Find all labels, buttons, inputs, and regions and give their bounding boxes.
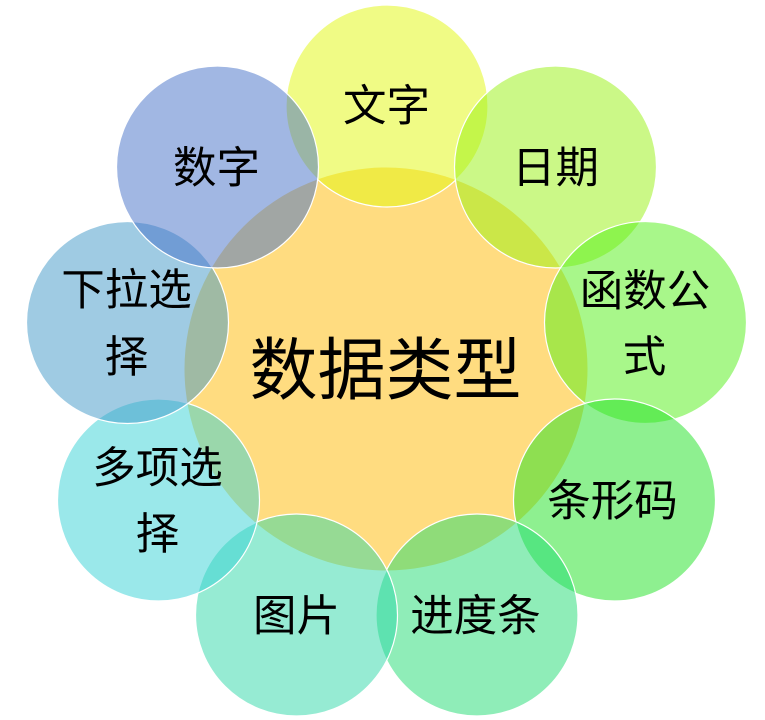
- petal circle: 图片: [196, 514, 398, 716]
- petal circle: 多项选择: [58, 399, 260, 601]
- petal circle: 条形码: [514, 399, 716, 601]
- heading: 数据类型: 数据类型: [249, 333, 522, 409]
- petal circle: 函数公式: [544, 222, 746, 424]
- label: 下拉选择: 择: [105, 334, 148, 382]
- label: 函数公式: 式: [623, 334, 666, 382]
- petal circle: 数字: [116, 66, 318, 268]
- label: 函数公式: 函数公: [580, 268, 710, 316]
- label: 日期: 日期: [512, 145, 599, 193]
- petal circle: 进度条: [376, 514, 578, 716]
- label: 数字: 数字: [173, 145, 260, 193]
- label: 多项选择: 多项选: [92, 445, 223, 493]
- petal circle: 文字: [286, 5, 488, 207]
- label: 图片: 图片: [253, 593, 340, 641]
- label: 条形码: 条形码: [547, 478, 678, 526]
- petal circle: 下拉选择: [26, 222, 228, 424]
- label: 下拉选择: 下拉选: [61, 267, 192, 315]
- central circle: [184, 168, 588, 570]
- petal circle: 日期: [454, 66, 656, 268]
- label: 多项选择: 择: [136, 511, 179, 559]
- label: 文字: 文字: [343, 83, 430, 131]
- label: 进度条: 进度条: [410, 593, 541, 641]
